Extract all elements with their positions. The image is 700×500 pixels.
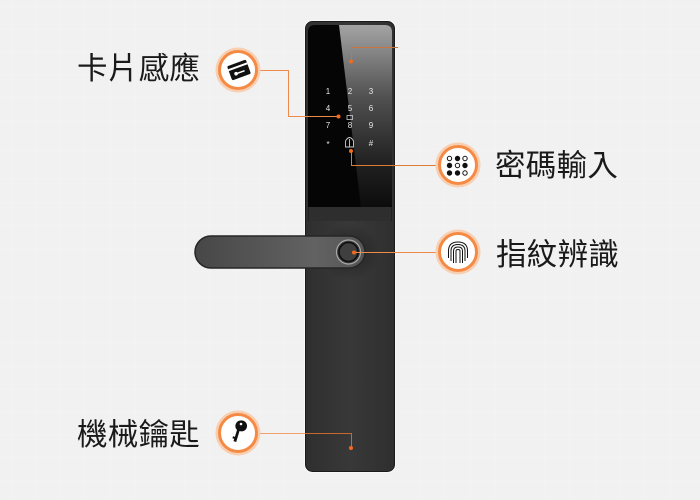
speaker grille bbox=[308, 207, 392, 221]
keypad digits: 1 bbox=[326, 87, 331, 96]
callout line: password bbox=[349, 149, 436, 166]
icon: keypad bbox=[436, 142, 480, 188]
label: card reader: 卡片感應 bbox=[77, 52, 200, 86]
keypad digits: # bbox=[369, 139, 374, 148]
icon: key bbox=[216, 410, 260, 456]
icon: card bbox=[216, 48, 260, 92]
door handle bbox=[195, 224, 380, 280]
fingerprint sensor bbox=[336, 240, 360, 264]
touch screen bbox=[308, 25, 392, 207]
keypad digits: * bbox=[326, 140, 330, 149]
keypad fingerprint symbol bbox=[346, 138, 354, 147]
keypad digits: 7 bbox=[326, 121, 331, 130]
door lock body bbox=[304, 20, 396, 473]
label: password input: 密碼輸入 bbox=[495, 149, 618, 183]
keypad digits: 8 bbox=[348, 121, 353, 130]
keypad digits bbox=[326, 87, 374, 149]
icon: fingerprint bbox=[436, 230, 480, 274]
keypad digits: 3 bbox=[369, 87, 374, 96]
callout line: mechanical key bbox=[260, 434, 353, 450]
keypad digits: 5 bbox=[348, 104, 353, 113]
callout line: top of glass bbox=[349, 48, 398, 64]
keypad digits: 2 bbox=[348, 87, 353, 96]
keypad digits: 4 bbox=[326, 104, 331, 113]
keypad card symbol bbox=[347, 116, 352, 120]
label: fingerprint recognition: 指紋辨識 bbox=[496, 238, 619, 272]
label: mechanical key: 機械鑰匙 bbox=[77, 418, 200, 452]
keypad digits: 9 bbox=[369, 121, 374, 130]
callout line: fingerprint bbox=[352, 250, 436, 254]
callout line: card reader bbox=[260, 70, 340, 118]
keypad digits: 6 bbox=[369, 104, 374, 113]
